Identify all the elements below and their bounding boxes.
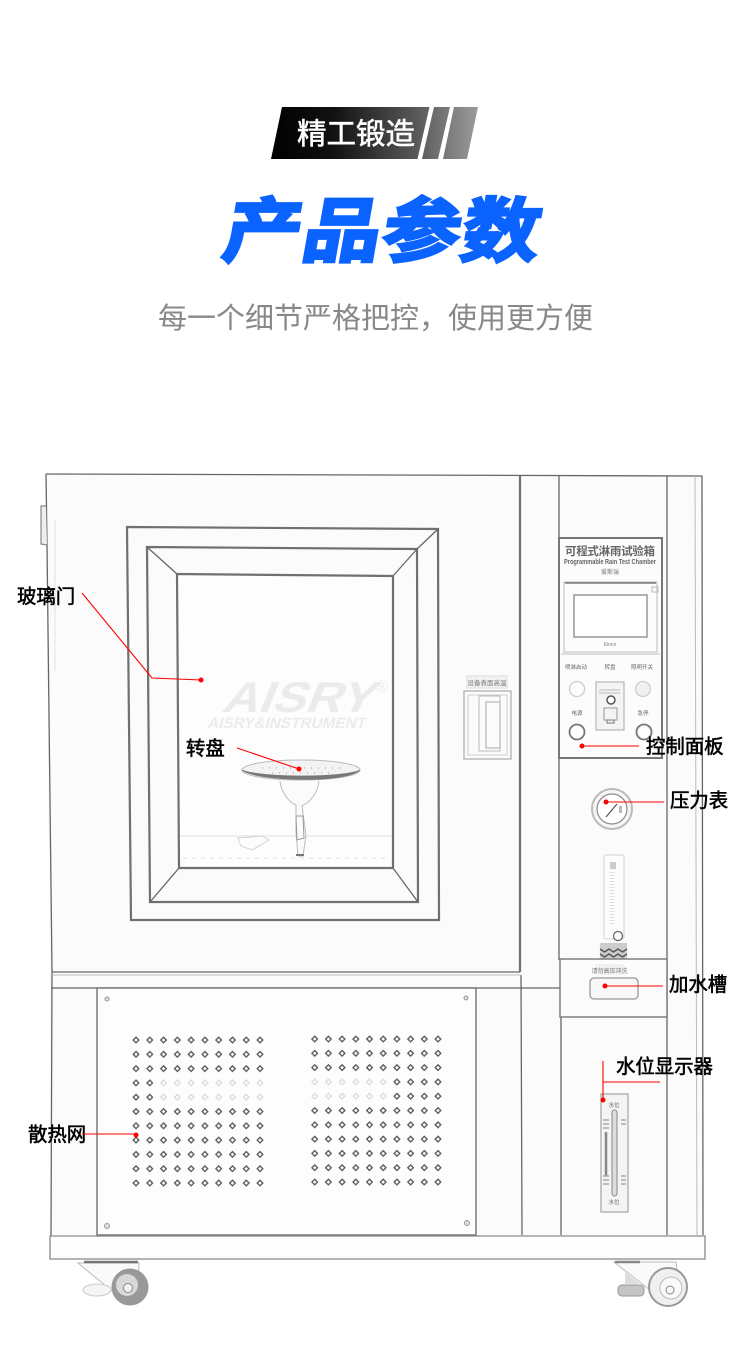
cabinet body [41, 474, 703, 1236]
callout: heat dissipation mesh [28, 1124, 138, 1146]
button labels: 喷淋启动 [565, 663, 587, 671]
callout: glass door: 玻璃门 [17, 586, 75, 608]
touch screen [564, 582, 658, 652]
button labels [565, 663, 653, 717]
machine base [50, 1236, 705, 1259]
water level indicator: 水位 [608, 1101, 620, 1109]
left caster [78, 1262, 148, 1306]
warning label zigzag [600, 943, 627, 959]
button labels: 急停 [637, 709, 649, 717]
button labels: 电源 [571, 709, 583, 717]
water level indicator: 水位 [608, 1198, 620, 1206]
callout: water level display: 水位显示器 [616, 1056, 713, 1078]
callout: water level display [600, 1056, 713, 1102]
water tank section [560, 959, 667, 1017]
panel subtitle: Programmable Rain Test Chamber [564, 559, 656, 566]
callout: pressure gauge: 压力表 [670, 790, 728, 812]
header badge [271, 107, 478, 159]
right caster [614, 1262, 687, 1306]
door hinge [41, 506, 47, 545]
callout: water tank: 加水槽 [669, 974, 727, 996]
callout: turntable [186, 738, 302, 772]
callout: water tank [602, 974, 727, 996]
heat dissipation panel [97, 988, 476, 1235]
machine illustration [41, 474, 705, 1306]
water level indicator [601, 1094, 628, 1212]
control panel [559, 538, 662, 758]
door handle: 设备表面高温 [468, 678, 507, 687]
pressure gauge [592, 789, 632, 829]
buttons [570, 682, 652, 740]
main title: 产品参数 [217, 192, 549, 271]
callout: heat dissipation mesh: 散热网 [28, 1124, 86, 1146]
water tank section: 请勿高压冲洗 [591, 967, 628, 975]
door handle [464, 676, 511, 759]
panel title: 可程式淋雨试验箱 [565, 544, 655, 558]
flow meter [604, 855, 624, 940]
badge parallelogram [271, 107, 430, 159]
watermark logo: AISRY&INSTRUMENT [206, 715, 369, 732]
panel screws [104, 996, 470, 1228]
vent grid left [129, 1033, 267, 1190]
callout: control panel [580, 736, 724, 758]
faded vent reflection [153, 1075, 390, 1104]
watermark logo: AISRY [217, 675, 386, 722]
watermark logo: ® [376, 677, 389, 696]
callout: control panel: 控制面板 [646, 736, 724, 758]
callout: pressure gauge [604, 790, 728, 812]
callout: turntable: 转盘 [186, 738, 225, 760]
turntable [238, 760, 360, 856]
badge stripes [422, 107, 478, 159]
badge text: 精工锻造 [297, 118, 415, 151]
panel brand: 爱斯瑞 [601, 568, 619, 576]
rotary timer switch [596, 682, 624, 730]
vent grid right [308, 1032, 445, 1189]
touch screen: Kinco [604, 642, 616, 648]
button labels: 照明开关 [631, 663, 653, 671]
watermark logo [206, 675, 389, 732]
subtitle: 每一个细节严格把控，使用更方便 [158, 302, 593, 335]
callout: glass door [17, 586, 204, 682]
glass door frame [127, 527, 439, 920]
button labels: 转盘 [604, 663, 616, 671]
